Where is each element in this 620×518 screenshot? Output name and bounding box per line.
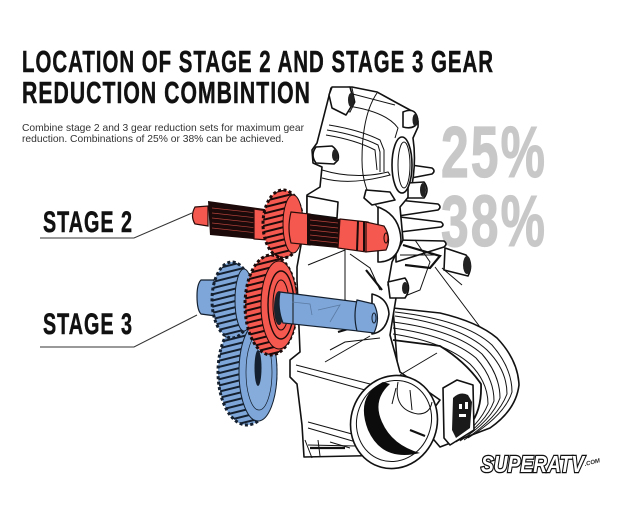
case: connector bbox=[443, 380, 474, 445]
SuperATV logo: SUPERATV bbox=[481, 451, 585, 477]
red shaft right bbox=[289, 212, 389, 252]
case: side tube bbox=[435, 248, 480, 327]
case: ribs and details bbox=[296, 88, 440, 458]
title bbox=[22, 44, 494, 110]
description text bbox=[22, 123, 305, 145]
percentage figures: 38% bbox=[441, 182, 547, 262]
stage 3 label: STAGE 3 bbox=[43, 308, 133, 341]
red upper gear bbox=[263, 190, 303, 258]
case: fins bbox=[396, 165, 446, 262]
blue output shaft bbox=[274, 291, 378, 333]
SuperATV logo: .COM bbox=[584, 458, 602, 468]
case: bearing bore bbox=[372, 137, 412, 334]
description text: reduction. Combinations of 25% or 38% can be achieved. bbox=[22, 134, 284, 145]
red shaft left tip bbox=[192, 206, 208, 226]
case: bellows housing bbox=[393, 308, 519, 447]
transmission case illustration bbox=[290, 87, 519, 481]
red lower gear bbox=[245, 255, 297, 355]
blue stub shaft bbox=[197, 280, 216, 316]
stage 3 blue gears bbox=[197, 262, 277, 425]
percentage figures bbox=[441, 113, 547, 262]
case: output ring bbox=[338, 363, 450, 481]
case: mounting bosses bbox=[307, 87, 427, 298]
stage 2 red shaft and gears bbox=[192, 190, 389, 355]
blue upper gear bbox=[212, 262, 253, 338]
blue lower gear bbox=[218, 319, 277, 425]
red shaft left spline bbox=[208, 201, 268, 240]
title: REDUCTION COMBINTION bbox=[22, 75, 311, 110]
stage 2 label: STAGE 2 bbox=[43, 206, 133, 239]
case: main body bbox=[290, 87, 440, 457]
description text: Combine stage 2 and 3 gear reduction sets for maximum gear bbox=[22, 123, 305, 134]
percentage figures: 25% bbox=[441, 113, 547, 193]
